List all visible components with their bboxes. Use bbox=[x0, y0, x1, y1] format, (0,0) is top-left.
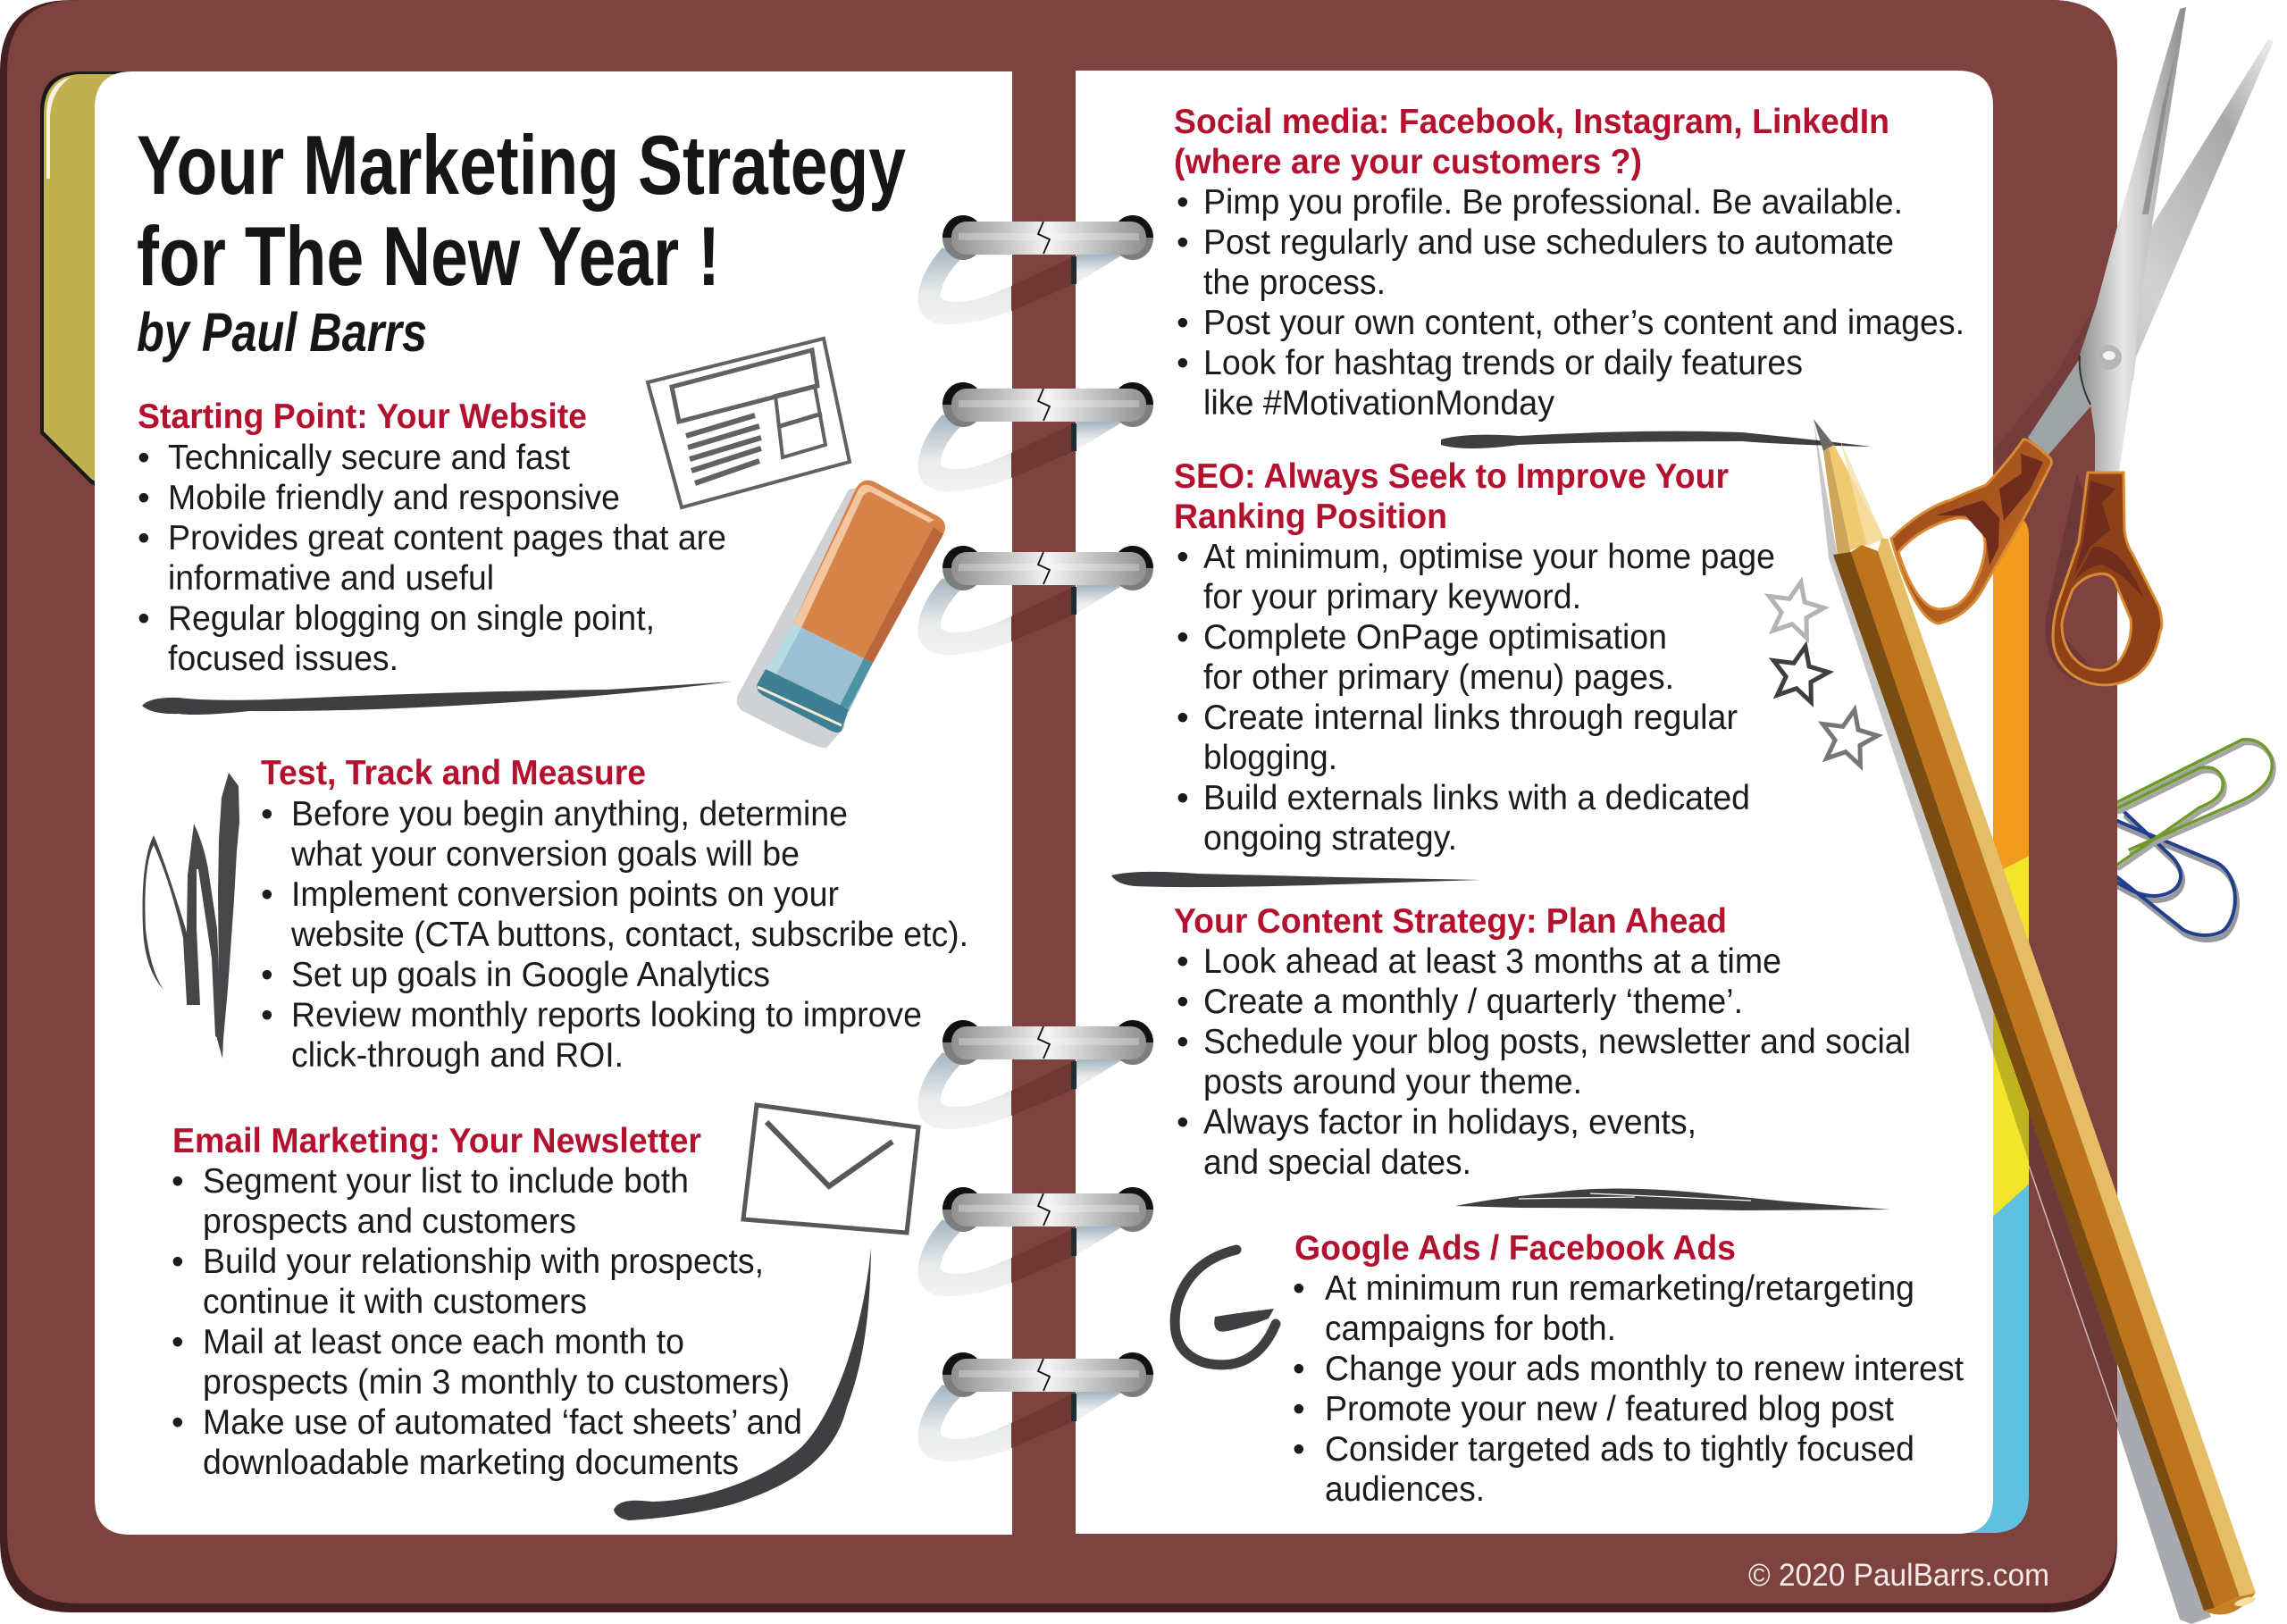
bullet list: • bbox=[1177, 344, 1189, 382]
bullet list bbox=[1177, 538, 1775, 858]
eraser teal band bbox=[757, 669, 849, 732]
bullet list: Technically secure and fast bbox=[168, 439, 570, 477]
bullet list: Create a monthly / quarterly ‘theme’. bbox=[1203, 983, 1743, 1021]
section: SEO bbox=[1174, 457, 1775, 858]
brush stroke divider bbox=[142, 682, 733, 715]
bullet list: blogging. bbox=[1203, 739, 1337, 777]
bullet list: • bbox=[1177, 699, 1189, 737]
star: light bbox=[1769, 582, 1824, 638]
blade: left bbox=[2080, 7, 2186, 472]
bullet list: Mail at least once each month to bbox=[203, 1323, 684, 1361]
bullet list: prospects (min 3 monthly to customers) bbox=[203, 1363, 790, 1402]
heading: Email Marketing: Your Newsletter bbox=[172, 1122, 701, 1160]
bullet list: Always factor in holidays, events, bbox=[1203, 1103, 1696, 1142]
section: google and facebook ads bbox=[1293, 1229, 1964, 1509]
bullet list: Schedule your blog posts, newsletter and social bbox=[1203, 1023, 1911, 1061]
title: for The New Year ! bbox=[137, 209, 720, 303]
gold bookmark tab bbox=[40, 71, 134, 487]
bullet list: • bbox=[261, 795, 273, 833]
bullet list: click-through and ROI. bbox=[291, 1036, 624, 1075]
brush stroke divider bbox=[1455, 1188, 1890, 1210]
bullet list: Complete OnPage optimisation bbox=[1203, 618, 1667, 657]
pencil tip bbox=[1814, 419, 1834, 451]
bullet list: Provides great content pages that are bbox=[168, 519, 726, 557]
bullet list: Look for hashtag trends or daily features bbox=[1203, 344, 1803, 382]
bullet list: continue it with customers bbox=[203, 1283, 587, 1321]
bullet list: Pimp you profile. Be professional. Be available. bbox=[1203, 183, 1903, 222]
pencil cone bbox=[1823, 445, 1884, 555]
icon: website wireframe sketch bbox=[648, 339, 850, 507]
heading: (where are your customers ?) bbox=[1174, 143, 1642, 181]
bullet list: Consider targeted ads to tightly focused bbox=[1325, 1430, 1914, 1469]
bullet list: what your conversion goals will be bbox=[290, 835, 800, 874]
bullet list: • bbox=[1293, 1350, 1305, 1388]
coloured index tabs bbox=[1956, 516, 2029, 1533]
bullet list: • bbox=[1293, 1269, 1305, 1308]
section: content strategy bbox=[1174, 902, 1911, 1182]
bullet list: Build your relationship with prospects, bbox=[203, 1243, 764, 1281]
bullet list: Promote your new / featured blog post bbox=[1325, 1390, 1894, 1428]
bullet list: Set up goals in Google Analytics bbox=[291, 956, 770, 994]
bullet list: Segment your list to include both bbox=[203, 1162, 689, 1201]
brush stroke divider bbox=[1441, 431, 1871, 448]
bullet list: like #MotivationMonday bbox=[1203, 384, 1554, 423]
bullet list: Change your ads monthly to renew interest bbox=[1325, 1350, 1964, 1388]
section: test track measure bbox=[261, 754, 968, 1075]
bullet list bbox=[261, 795, 968, 1075]
icon: eraser bbox=[737, 481, 945, 748]
eraser blue body bbox=[766, 624, 873, 712]
heading bbox=[1174, 103, 1889, 181]
bullet list: posts around your theme. bbox=[1203, 1063, 1582, 1101]
bullet list: audiences. bbox=[1325, 1470, 1485, 1509]
bullet list: campaigns for both. bbox=[1325, 1310, 1616, 1348]
bullet list: • bbox=[1177, 1103, 1189, 1142]
bullet list: • bbox=[1177, 538, 1189, 576]
bullet list: • bbox=[1177, 183, 1189, 222]
title: Your Marketing Strategy bbox=[137, 118, 906, 212]
ring 4 bbox=[918, 1020, 1153, 1129]
bullet list: the process. bbox=[1203, 264, 1386, 302]
pencil bbox=[1814, 419, 2257, 1624]
eraser orange sleeve bbox=[793, 481, 945, 663]
tab: blue bbox=[1956, 1185, 2029, 1533]
ring 6 bbox=[918, 1352, 1153, 1461]
star: dark bbox=[1773, 647, 1829, 702]
bullet list: for other primary (menu) pages. bbox=[1203, 658, 1674, 697]
bullet list: Make use of automated ‘fact sheets’ and bbox=[203, 1403, 802, 1442]
bullet list: Implement conversion points on your bbox=[291, 875, 839, 914]
bullet list: • bbox=[138, 439, 150, 477]
pencil body: dark facet bbox=[1833, 552, 2215, 1611]
spiral binding rings bbox=[918, 215, 1153, 1461]
section: email marketing bbox=[172, 1122, 802, 1482]
bullet list: for your primary keyword. bbox=[1203, 578, 1581, 616]
heading: Starting Point: Your Website bbox=[138, 398, 587, 436]
pivot screw bbox=[2095, 345, 2122, 370]
scissors bbox=[1891, 7, 2274, 688]
heading: SEO: Always Seek to Improve Your bbox=[1174, 457, 1729, 496]
bullet list: Build externals links with a dedicated bbox=[1203, 779, 1750, 817]
bullet list: Mobile friendly and responsive bbox=[168, 479, 620, 517]
right page bbox=[1076, 71, 1993, 1534]
heading: Ranking Position bbox=[1174, 498, 1447, 536]
bullet list: • bbox=[172, 1243, 184, 1281]
bullet list: focused issues. bbox=[168, 640, 398, 678]
bullet list: At minimum run remarketing/retargeting bbox=[1325, 1269, 1914, 1308]
bullet list: • bbox=[1177, 942, 1189, 981]
icon: green paper clip bbox=[2117, 740, 2274, 868]
icon: brush letter G bbox=[1175, 1250, 1276, 1365]
bullet list: informative and useful bbox=[168, 559, 494, 598]
bullet list: • bbox=[172, 1403, 184, 1442]
bullet list: Look ahead at least 3 months at a time bbox=[1203, 942, 1781, 981]
pencil body: light facet bbox=[1878, 539, 2256, 1596]
icon: grass brush strokes bbox=[143, 773, 239, 1059]
star: mid bbox=[1822, 710, 1878, 766]
bullet list bbox=[1177, 942, 1911, 1182]
bullet list: downloadable marketing documents bbox=[203, 1444, 739, 1482]
brush stroke divider bbox=[1111, 872, 1480, 887]
section: starting point bbox=[138, 398, 726, 678]
scissor shadow on cover bbox=[1993, 304, 2097, 469]
bullet list: • bbox=[1177, 618, 1189, 657]
copyright: © 2020 PaulBarrs.com bbox=[1748, 1558, 2049, 1593]
eraser shadow bbox=[737, 487, 862, 748]
bullet list: • bbox=[261, 956, 273, 994]
bullet list: website (CTA buttons, contact, subscribe etc). bbox=[290, 916, 968, 954]
ring 5 bbox=[918, 1187, 1153, 1296]
brush swoosh bbox=[614, 1248, 871, 1520]
bullet list: • bbox=[1177, 223, 1189, 262]
tab: orange bbox=[1993, 516, 2029, 875]
bullet list: • bbox=[1293, 1390, 1305, 1428]
bullet list: and special dates. bbox=[1203, 1143, 1471, 1182]
bullet list: Post your own content, other’s content and images. bbox=[1203, 304, 1964, 342]
icon: envelope sketch bbox=[743, 1105, 918, 1233]
bullet list: Post regularly and use schedulers to automate bbox=[1203, 223, 1894, 262]
bullet list: • bbox=[1293, 1430, 1305, 1469]
bullet list: prospects and customers bbox=[203, 1202, 576, 1241]
bullet list: • bbox=[1177, 779, 1189, 817]
bullet list: Create internal links through regular bbox=[1203, 699, 1738, 737]
heading: Social media: Facebook, Instagram, LinkedIn bbox=[1174, 103, 1889, 141]
bullet list: • bbox=[172, 1323, 184, 1361]
bullet list: • bbox=[138, 599, 150, 638]
byline: by Paul Barrs bbox=[137, 302, 427, 363]
pencil shadow on cover bbox=[2029, 1113, 2117, 1427]
bullet list: • bbox=[138, 519, 150, 557]
pencil body: mid facet bbox=[1851, 545, 2240, 1608]
bullet list bbox=[1177, 183, 1964, 423]
bullet list: • bbox=[261, 875, 273, 914]
bullet list bbox=[138, 439, 726, 678]
bullet list: ongoing strategy. bbox=[1203, 819, 1457, 858]
bullet list bbox=[1293, 1269, 1964, 1509]
title bbox=[137, 118, 906, 363]
heading bbox=[1174, 457, 1729, 536]
pencil shadow beyond cover bbox=[2117, 1367, 2211, 1624]
icon: three sketched stars bbox=[1769, 582, 1878, 766]
section: social media bbox=[1174, 103, 1964, 423]
ring 1 bbox=[918, 215, 1153, 324]
bullet list: Regular blogging on single point, bbox=[168, 599, 655, 638]
heading: Your Content Strategy: Plan Ahead bbox=[1174, 902, 1727, 941]
bullet list: Before you begin anything, determine bbox=[291, 795, 848, 833]
bullet list: • bbox=[1177, 304, 1189, 342]
bullet list: • bbox=[172, 1162, 184, 1201]
handle: left bbox=[1891, 439, 2051, 624]
bullet list: Review monthly reports looking to improve bbox=[291, 996, 922, 1034]
ring 3 bbox=[918, 546, 1153, 655]
blade: right bbox=[2028, 39, 2274, 456]
heading: Test, Track and Measure bbox=[261, 754, 646, 792]
bullet list: • bbox=[138, 479, 150, 517]
bullet list: • bbox=[1177, 1023, 1189, 1061]
bullet list: • bbox=[261, 996, 273, 1034]
pencil shadow edge line bbox=[2029, 1166, 2117, 1422]
icon: blue paper clip bbox=[2117, 812, 2237, 940]
pencil end bbox=[2204, 1593, 2257, 1615]
pencil shadow on page bbox=[1814, 419, 2029, 1161]
bullet list: • bbox=[1177, 983, 1189, 1021]
heading: Google Ads / Facebook Ads bbox=[1294, 1229, 1736, 1268]
bullet list: At minimum, optimise your home page bbox=[1203, 538, 1775, 576]
handle: bottom bbox=[2053, 473, 2162, 685]
ring 2 bbox=[918, 382, 1153, 491]
shank: left handle bbox=[2028, 360, 2090, 456]
tab: yellow bbox=[1993, 856, 2029, 1217]
left page bbox=[95, 71, 1012, 1535]
bullet list bbox=[172, 1162, 802, 1482]
